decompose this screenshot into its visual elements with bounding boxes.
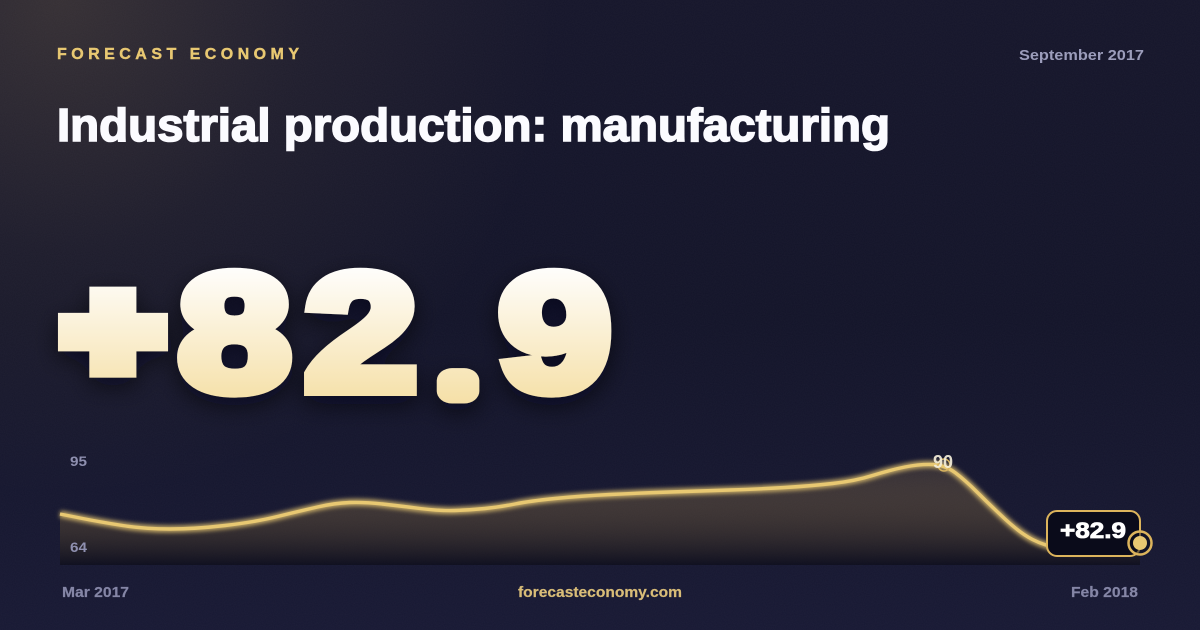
line chart [60,452,1152,565]
peak marker [938,459,950,471]
website label: forecasteconomy.com [518,585,682,601]
current value badge [1047,511,1140,556]
big value: + [66,258,160,405]
title: Industrial production: manufacturing [57,99,890,151]
big value [66,241,611,425]
y-axis min label: 64 [70,539,87,555]
data line [60,464,1140,550]
peak label: 90 [933,452,953,472]
end point marker [1128,532,1152,554]
chart area fill [60,464,1140,565]
big value: 9 [499,241,611,425]
end date label: Feb 2018 [1071,585,1138,601]
start date label: Mar 2017 [62,585,129,601]
line glow [60,464,1140,550]
date label: September 2017 [1019,47,1144,64]
big value: 82 [179,241,417,425]
current value badge: +82.9 [1060,518,1126,543]
brand label: FORECAST ECONOMY [57,46,299,63]
big value: . [446,327,470,406]
y-axis max label: 95 [70,453,87,469]
